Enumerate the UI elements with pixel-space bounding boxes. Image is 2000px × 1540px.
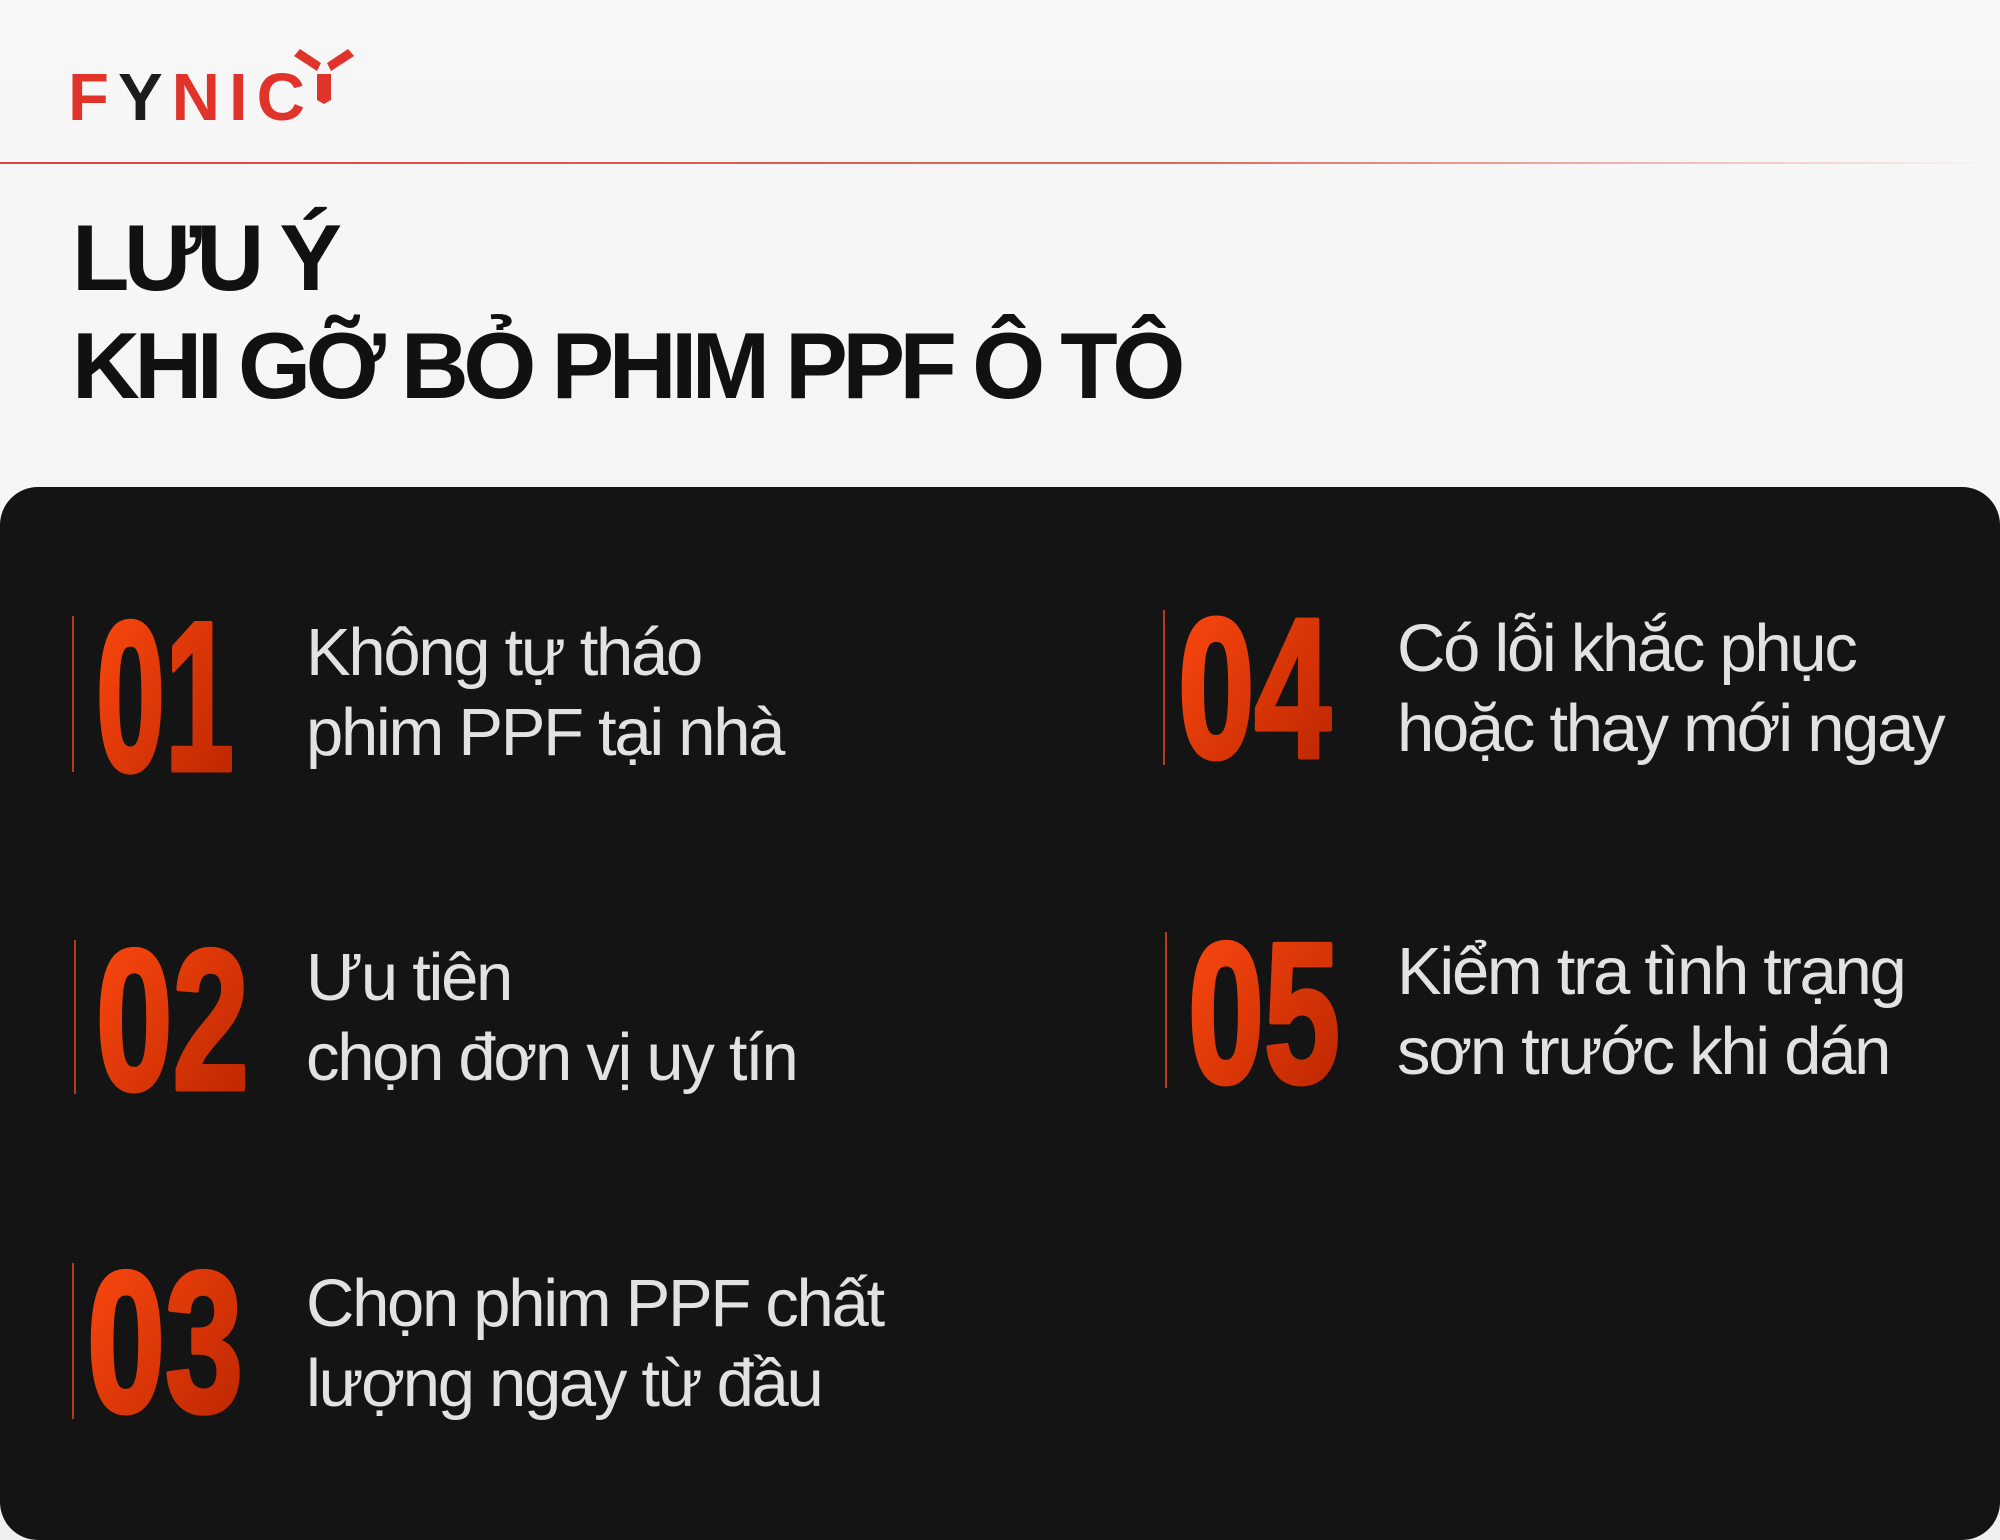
number 03: 03 xyxy=(87,1231,243,1454)
text 05 xyxy=(1397,934,1904,1089)
text 04 xyxy=(1397,611,1946,766)
text 03: Chọn phim PPF chất xyxy=(306,1266,883,1341)
text 04: Có lỗi khắc phục xyxy=(1397,611,1856,686)
title: LƯU Ý xyxy=(72,205,337,310)
text 05: sơn trước khi dán xyxy=(1397,1014,1889,1089)
text 01: Không tự tháo xyxy=(306,615,701,690)
icon: logo mark xyxy=(294,49,354,104)
logo: FYNIC xyxy=(68,60,314,135)
text 05: Kiểm tra tình trạng xyxy=(1397,934,1904,1009)
panel: dark list xyxy=(0,487,2000,1540)
text 03 xyxy=(306,1266,885,1421)
text 01: phim PPF tại nhà xyxy=(306,695,783,770)
number 01: 01 xyxy=(96,578,234,816)
text 02: chọn đơn vị uy tín xyxy=(306,1020,796,1095)
text 02 xyxy=(306,940,796,1095)
number 02: 02 xyxy=(96,909,249,1132)
number 04: 04 xyxy=(1178,578,1331,800)
text 02: Ưu tiên xyxy=(306,940,511,1015)
number 05: 05 xyxy=(1188,902,1340,1125)
title xyxy=(72,205,1182,418)
text 04: hoặc thay mới ngay xyxy=(1397,691,1943,766)
text 01 xyxy=(306,615,786,770)
divider line xyxy=(0,162,2000,164)
title: KHI GỠ BỎ PHIM PPF Ô TÔ xyxy=(72,313,1180,418)
text 03: lượng ngay từ đầu xyxy=(306,1346,821,1421)
